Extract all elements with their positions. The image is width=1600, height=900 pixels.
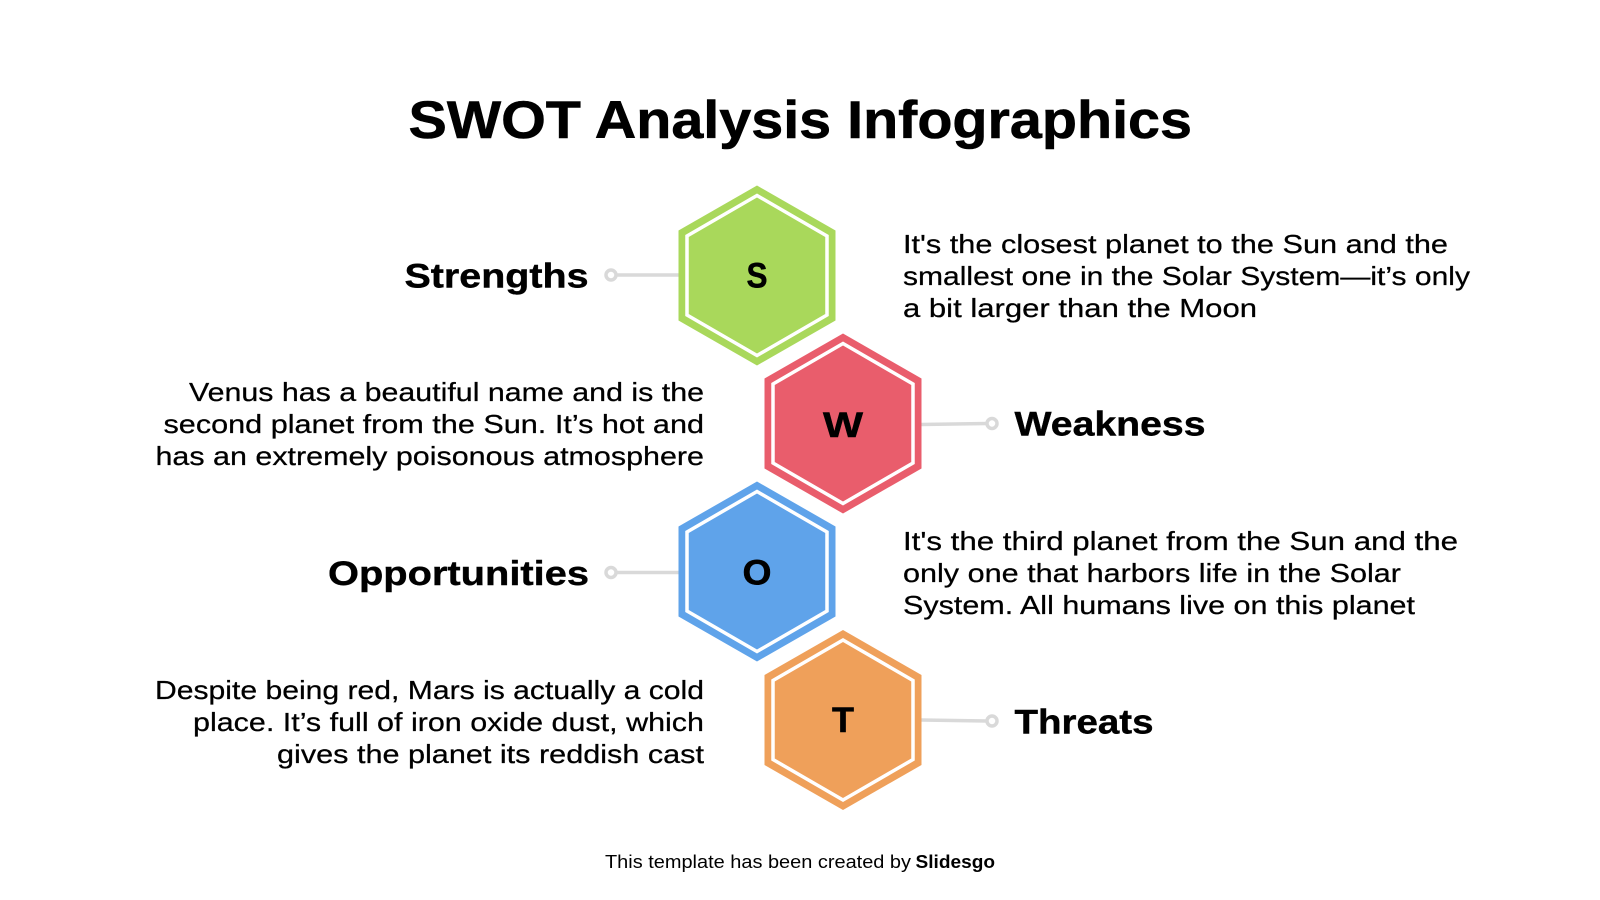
connector: threats [921, 716, 997, 726]
connector: opportunities [606, 568, 680, 578]
text: strengths description: smallest one in the Solar System—it’s only [903, 261, 1470, 291]
text: threats description [155, 675, 705, 769]
hexagon: W [764, 334, 922, 514]
text: strengths description [903, 229, 1470, 323]
text: weakness description [156, 377, 704, 471]
connector: weakness [921, 418, 997, 428]
connector: strengths [606, 270, 680, 280]
hexagon: T: T [832, 701, 854, 740]
text: weakness description: has an extremely poisonous atmosphere [156, 441, 704, 471]
hexagon: S: S [746, 256, 768, 296]
text: strengths description: a bit larger than the Moon [903, 293, 1257, 323]
text: opportunities description: It's the third planet from the Sun and the [903, 526, 1458, 556]
hexagon: S [678, 186, 836, 366]
text: opportunities description: only one that harbors life in the Solar [903, 558, 1401, 588]
footer credit: Slidesgo [916, 852, 995, 872]
hexagon: W: W [823, 406, 863, 445]
text: weakness description: second planet from the Sun. It’s hot and [164, 409, 704, 439]
hexagon: T [764, 630, 922, 810]
title: SWOT Analysis Infographics [408, 91, 1192, 150]
text: weakness description: Venus has a beautiful name and is the [189, 377, 704, 407]
label: opportunities: Opportunities [328, 555, 589, 593]
text: strengths description: It's the closest planet to the Sun and the [903, 229, 1448, 259]
panel: weakness [156, 334, 1206, 514]
label: threats: Threats [1014, 704, 1154, 742]
panel: strengths [404, 186, 1470, 366]
text: threats description: Despite being red, Mars is actually a cold [155, 675, 704, 705]
text: opportunities description: System. All humans live on this planet [903, 590, 1416, 620]
label: strengths: Strengths [404, 258, 588, 296]
footer credit: This template has been created by [605, 852, 911, 872]
text: threats description: gives the planet its reddish cast [277, 739, 705, 769]
hexagon: O [678, 482, 836, 662]
panel: threats [155, 630, 1154, 810]
text: opportunities description [903, 526, 1458, 620]
panel: opportunities [328, 482, 1458, 662]
label: weakness: Weakness [1014, 406, 1206, 444]
text: threats description: place. It’s full of iron oxide dust, which [193, 707, 704, 737]
hexagon: O: O [742, 554, 772, 592]
